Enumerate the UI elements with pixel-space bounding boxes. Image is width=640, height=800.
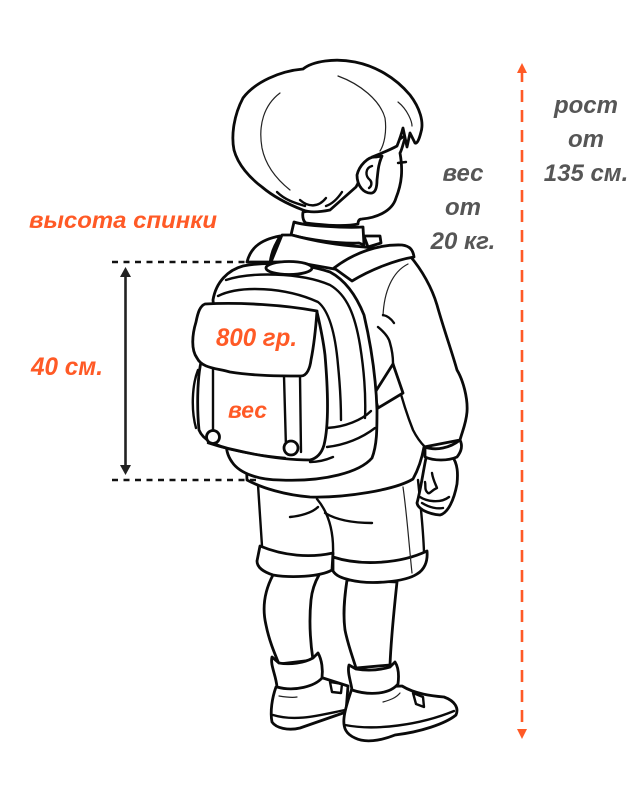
pocket buttons (206, 430, 220, 444)
dashed guide: top of back (112, 261, 246, 263)
side band (327, 411, 375, 447)
label: 800 g: 800 гр. (216, 324, 297, 352)
jacket cuff (425, 440, 461, 460)
label: 40 cm: 40 см. (30, 353, 103, 381)
left shoe (271, 653, 348, 729)
label: child height (544, 92, 628, 187)
label: child weight: 20 кг. (430, 228, 495, 255)
arrow: height (517, 63, 527, 739)
label: back height: высота спинки (29, 207, 217, 233)
front pocket (198, 312, 328, 460)
left leg (264, 575, 319, 664)
label: child weight: от (445, 194, 481, 221)
label: child weight: вес (443, 160, 483, 187)
label: weight on backpack: вес (228, 397, 267, 423)
collar (271, 222, 390, 270)
flap (193, 303, 317, 376)
arrow: back height (120, 267, 131, 475)
right shoe (344, 662, 457, 741)
label: child height: от (568, 126, 604, 153)
label: child height: рост (553, 92, 618, 119)
jacket body and arm (240, 240, 467, 497)
right backpack strap (334, 245, 414, 408)
dashed guide: bottom of back (112, 479, 258, 481)
right leg (344, 580, 397, 668)
backpack (193, 262, 377, 480)
handle (266, 262, 312, 274)
head and hair (233, 60, 422, 226)
label: child height: 135 см. (544, 160, 628, 187)
illustration: boy with backpack (193, 60, 467, 741)
hand (417, 456, 457, 515)
left backpack strap (247, 236, 280, 262)
shorts (257, 475, 427, 582)
backpack main body (213, 264, 377, 480)
label: child weight (430, 160, 495, 255)
